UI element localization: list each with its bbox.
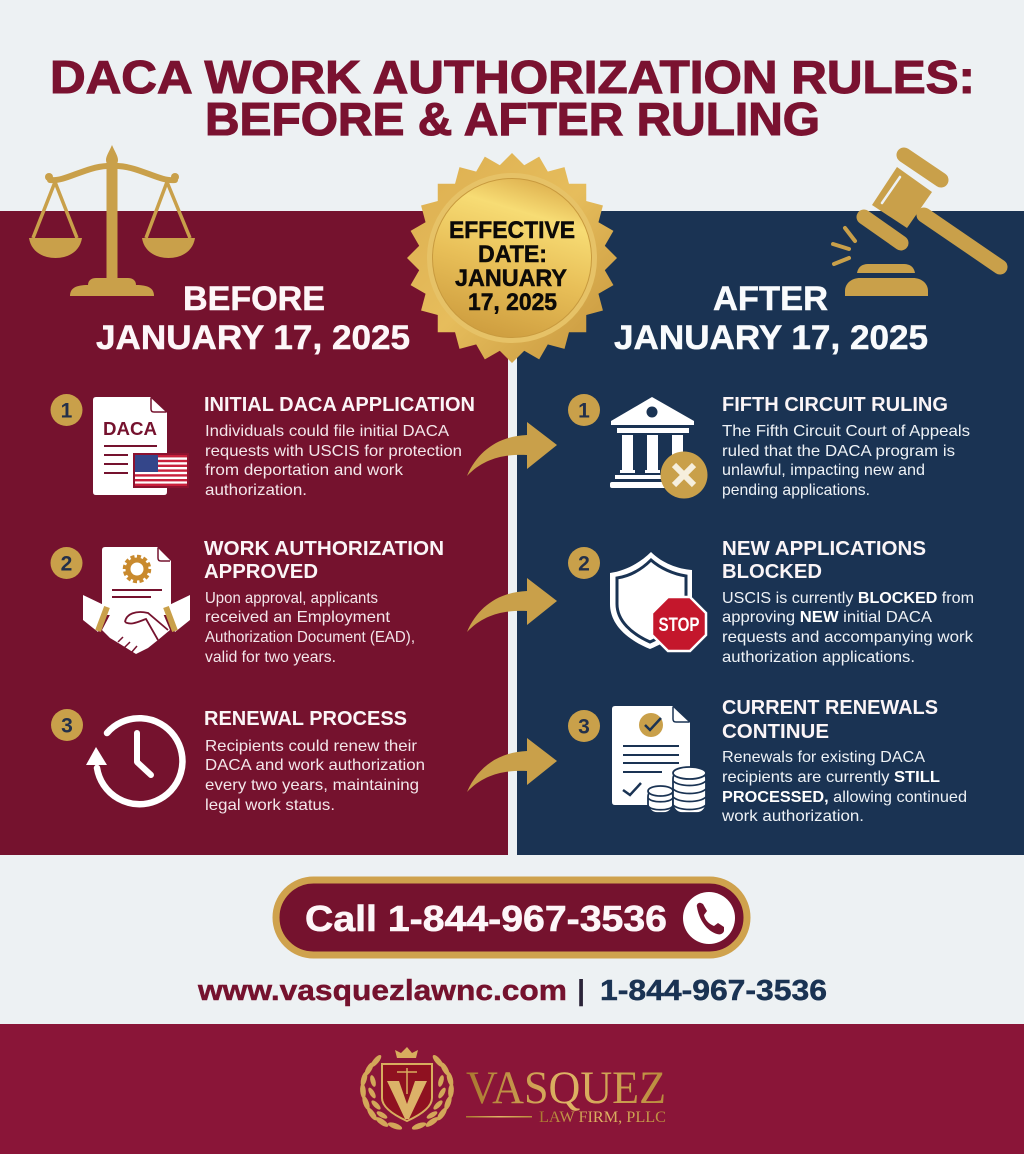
seal: effective date bbox=[406, 152, 618, 364]
text: work authorization approved: Authorization Document (EAD), bbox=[205, 629, 415, 646]
badge 3: 3 bbox=[578, 716, 590, 738]
heading: after: AFTER bbox=[713, 280, 828, 318]
text: renewal process: legal work status. bbox=[205, 797, 335, 814]
text: fifth circuit ruling bbox=[722, 393, 970, 499]
website and phone line: | bbox=[577, 975, 585, 1007]
website and phone line: 1-844-967-3536 bbox=[600, 975, 827, 1007]
icon: shield with stop sign bbox=[610, 552, 706, 651]
step: current renewals continue bbox=[568, 696, 967, 825]
seal: effective date: JANUARY bbox=[455, 265, 567, 292]
text: initial DACA application: requests with USCIS for protection bbox=[205, 443, 462, 460]
badge 2: 2 bbox=[61, 552, 72, 576]
icon: renewal clock bbox=[86, 718, 182, 804]
text: work authorization approved bbox=[204, 537, 444, 666]
text: new applications blocked: requests and accompanying work bbox=[722, 629, 974, 646]
badge 1 bbox=[50, 394, 82, 426]
badge 2: 2 bbox=[578, 552, 590, 576]
text: current renewals continue bbox=[721, 696, 967, 825]
icon: approved document and handshake bbox=[83, 547, 190, 654]
text: new applications blocked: NEW APPLICATIONS bbox=[722, 537, 926, 560]
badge 3 bbox=[568, 710, 600, 742]
icon: scales of justice bbox=[29, 145, 195, 296]
logo: Vasquez Law Firm bbox=[359, 1047, 666, 1131]
seal: effective date: DATE: bbox=[478, 241, 547, 268]
seal: effective date: EFFECTIVE bbox=[449, 217, 575, 244]
text: renewal process: Recipients could renew their bbox=[205, 738, 418, 755]
arrow: step 2 bbox=[467, 578, 557, 632]
text: work authorization approved: received an Employment bbox=[205, 609, 391, 626]
logo wordmark: LAW FIRM, PLLC bbox=[539, 1109, 666, 1126]
text: current renewals continue: Renewals for existing DACA bbox=[722, 749, 925, 766]
text: initial DACA application: authorization. bbox=[205, 482, 307, 499]
text: current renewals continue: PROCESSED, allowing continued bbox=[722, 789, 967, 806]
text: new applications blocked bbox=[722, 537, 974, 666]
badge 3: 3 bbox=[61, 714, 73, 738]
badge 1 bbox=[568, 394, 600, 426]
text: work authorization approved: Upon approval, applicants bbox=[205, 590, 378, 607]
text: fifth circuit ruling: ruled that the DACA program is bbox=[722, 443, 955, 460]
text: fifth circuit ruling: The Fifth Circuit Court of Appeals bbox=[722, 423, 970, 440]
text: initial DACA application: from deportation and work bbox=[205, 462, 404, 479]
badge 2 bbox=[50, 547, 82, 579]
text: initial DACA application: INITIAL DACA APPLICATION bbox=[204, 393, 475, 416]
logo wordmark: VASQUEZ bbox=[466, 1062, 666, 1114]
text: fifth circuit ruling: FIFTH CIRCUIT RULING bbox=[722, 393, 948, 416]
heading: before: BEFORE bbox=[183, 280, 325, 318]
text: current renewals continue: recipients are currently STILL bbox=[722, 769, 940, 786]
badge 2 bbox=[568, 547, 600, 579]
arrow: step 1 bbox=[467, 422, 557, 476]
panel: after bbox=[517, 155, 1024, 855]
icon: phone bbox=[683, 892, 735, 944]
badge 1: 1 bbox=[578, 400, 590, 422]
text: current renewals continue: work authorization. bbox=[721, 808, 864, 825]
heading: after: JANUARY 17, 2025 bbox=[614, 319, 928, 357]
icon: DACA document with flag: DACA bbox=[103, 419, 157, 439]
seal: effective date: 17, 2025 bbox=[468, 289, 557, 316]
text: renewal process: DACA and work authorization bbox=[205, 757, 425, 774]
icon: DACA document with flag bbox=[93, 397, 189, 495]
text: renewal process: RENEWAL PROCESS bbox=[204, 707, 407, 730]
text: new applications blocked: authorization applications. bbox=[722, 649, 915, 666]
text: new applications blocked: BLOCKED bbox=[722, 560, 822, 583]
icon: courthouse with X bbox=[610, 397, 708, 498]
logo crest bbox=[359, 1047, 455, 1131]
badge 1: 1 bbox=[61, 400, 73, 422]
text: renewal process bbox=[204, 707, 425, 814]
step: initial DACA application bbox=[50, 393, 475, 499]
text: fifth circuit ruling: pending applications. bbox=[722, 482, 870, 499]
step: work authorization approved bbox=[50, 537, 444, 666]
icon: document with coins bbox=[612, 706, 706, 813]
text: initial DACA application: Individuals could file initial DACA bbox=[205, 423, 449, 440]
heading: after bbox=[614, 280, 928, 357]
arrow: step 3 bbox=[467, 738, 557, 792]
text: new applications blocked: approving NEW initial DACA bbox=[722, 609, 932, 626]
title: DACA WORK AUTHORIZATION RULES: bbox=[50, 51, 975, 103]
text: work authorization approved: APPROVED bbox=[204, 560, 318, 583]
footer band bbox=[0, 1024, 1024, 1154]
text: renewal process: every two years, maintaining bbox=[205, 777, 419, 794]
text: work authorization approved: valid for two years. bbox=[205, 649, 336, 666]
step: fifth circuit ruling bbox=[568, 393, 970, 499]
step: renewal process bbox=[51, 707, 425, 814]
text: initial DACA application bbox=[204, 393, 475, 499]
badge 3 bbox=[51, 709, 83, 741]
website and phone line: www.vasquezlawnc.com bbox=[197, 975, 567, 1007]
text: fifth circuit ruling: unlawful, impacting new and bbox=[722, 462, 925, 479]
heading: before bbox=[96, 280, 410, 357]
title: BEFORE & AFTER RULING bbox=[205, 93, 820, 145]
icon: gavel bbox=[833, 155, 1000, 296]
text: new applications blocked: USCIS is currently BLOCKED from bbox=[722, 590, 974, 607]
title bbox=[50, 51, 975, 145]
panel: before bbox=[0, 145, 508, 855]
call button: Call 1-844-967-3536 bbox=[305, 898, 667, 939]
heading: before: JANUARY 17, 2025 bbox=[96, 319, 410, 357]
text: work authorization approved: WORK AUTHORIZATION bbox=[204, 537, 444, 560]
step: new applications blocked bbox=[568, 537, 974, 666]
icon: shield with stop sign: STOP bbox=[658, 615, 700, 636]
text: current renewals continue: CONTINUE bbox=[722, 720, 829, 743]
call button bbox=[276, 880, 747, 955]
text: current renewals continue: CURRENT RENEWALS bbox=[722, 696, 938, 719]
website and phone line bbox=[197, 975, 827, 1007]
